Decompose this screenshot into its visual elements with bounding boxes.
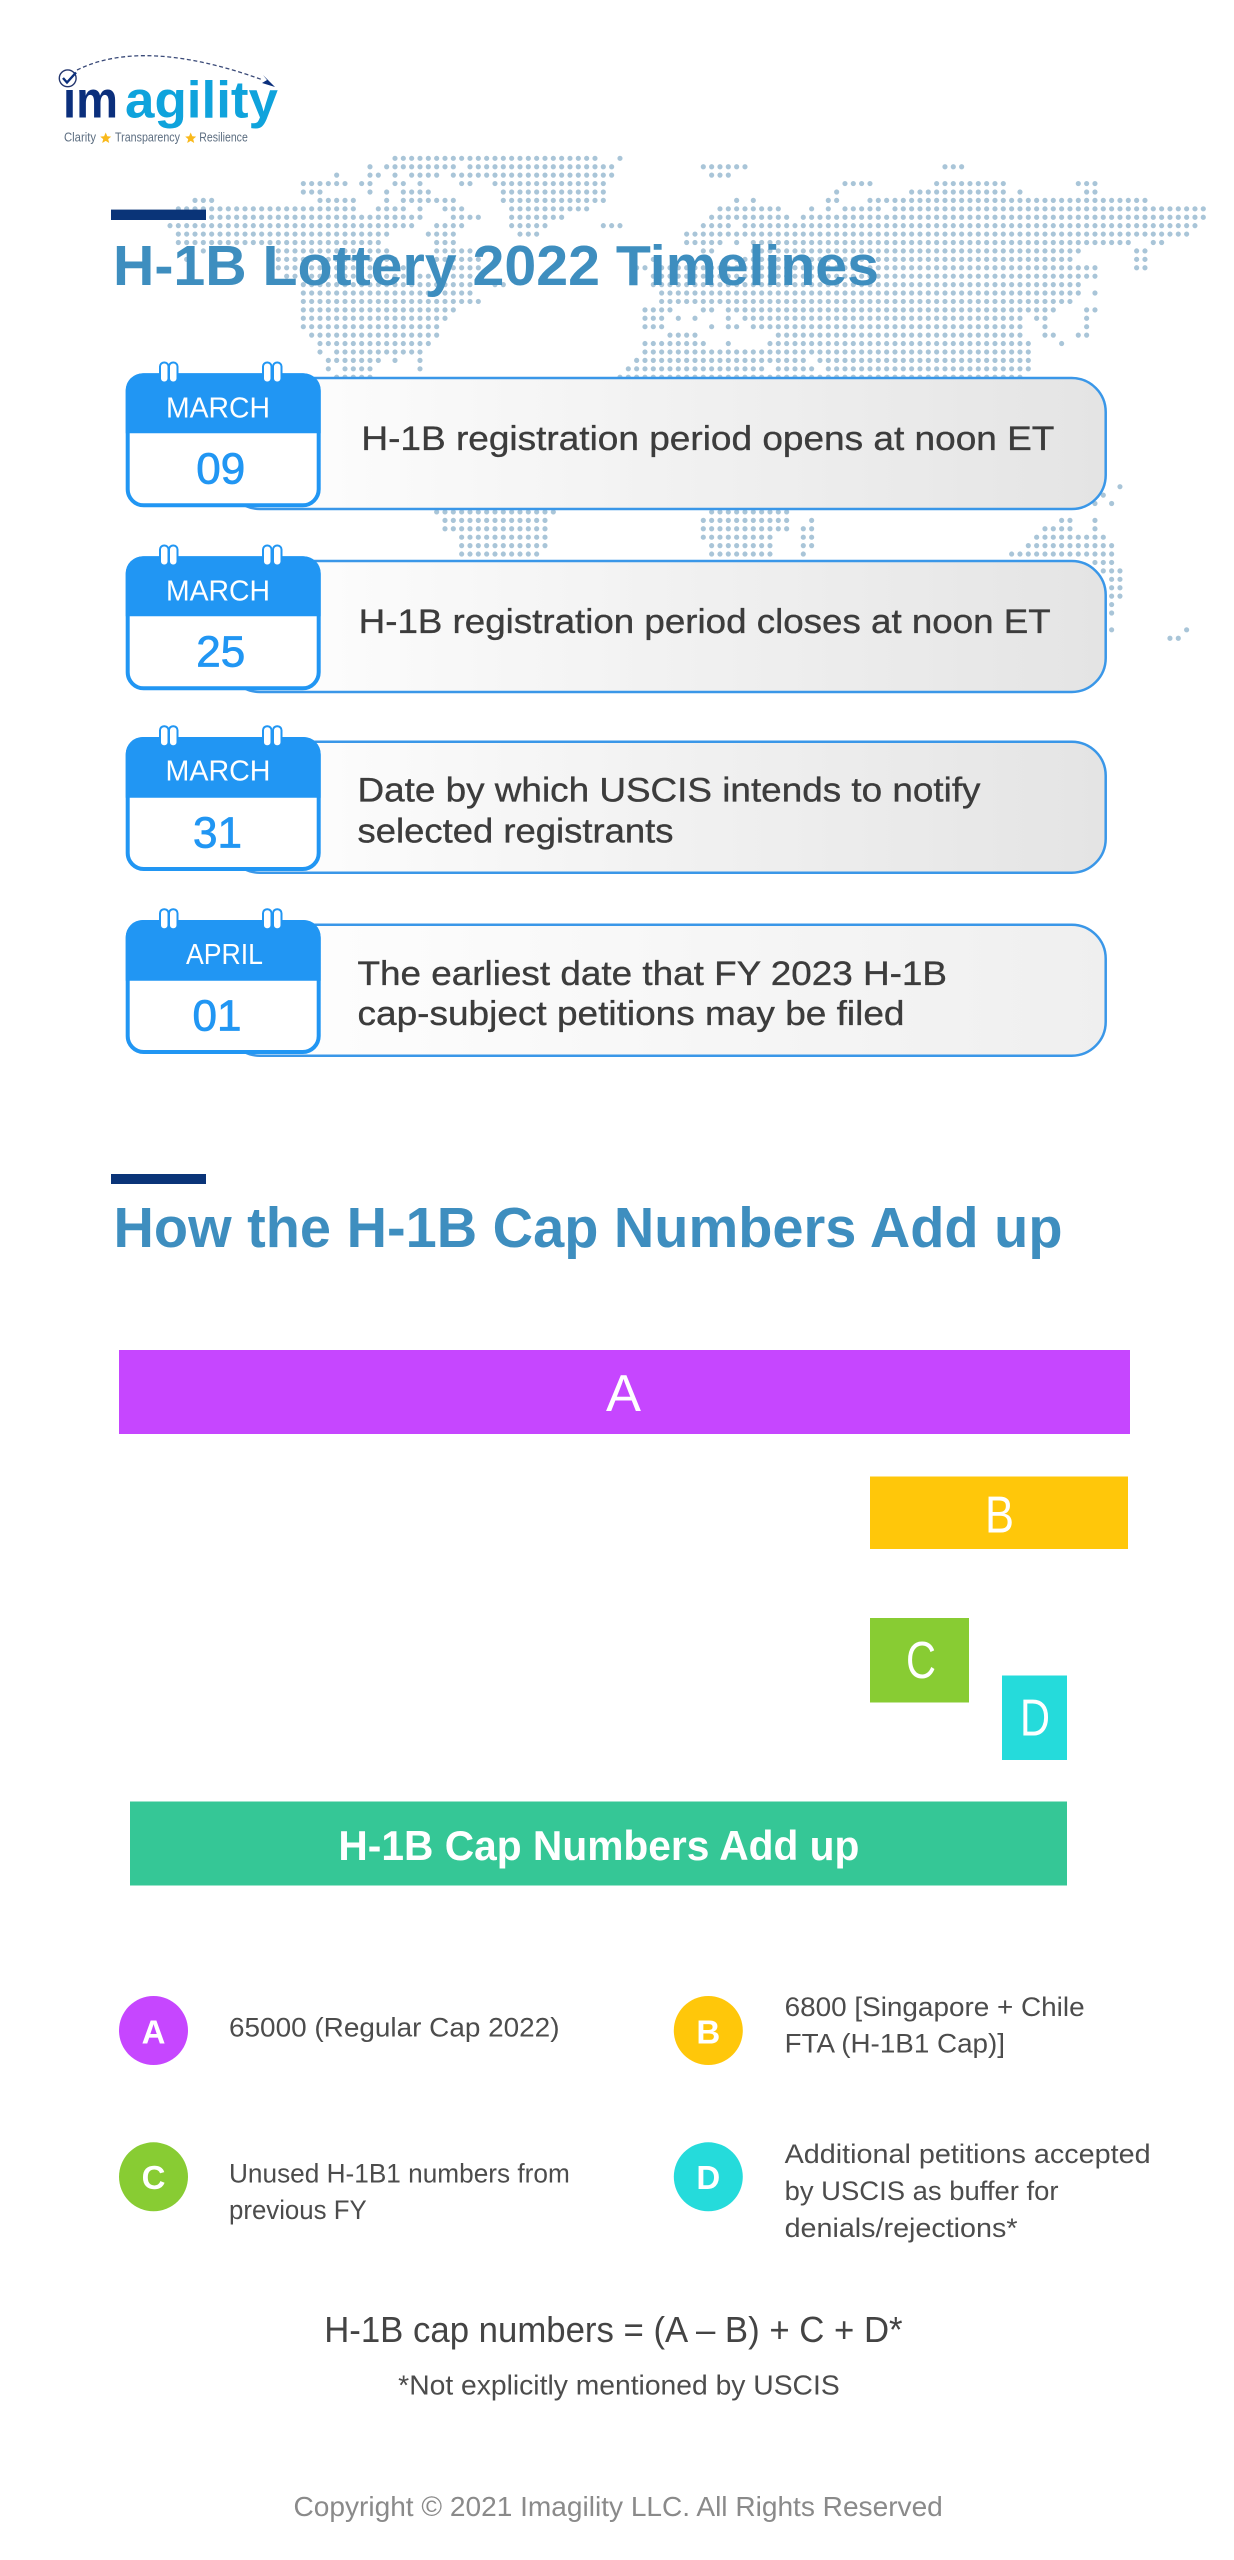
timeline item: March 25: 25 bbox=[196, 627, 245, 676]
timeline item: April 01 bbox=[126, 909, 1106, 1056]
timeline item: March 25 bbox=[126, 546, 1106, 692]
legend: D: denials/rejections* bbox=[785, 2213, 1018, 2243]
bar diagram: cap numbers: H-1B Cap Numbers Add up bbox=[338, 1822, 859, 1869]
legend: B: 6800 [Singapore + Chile bbox=[785, 1992, 1085, 2022]
timeline item: March 09 bbox=[126, 362, 1106, 509]
legend: B: B bbox=[696, 2013, 720, 2050]
bar diagram: cap numbers: C bbox=[906, 1632, 936, 1690]
timeline item: March 09: MARCH bbox=[166, 392, 270, 424]
heading: How the H-1B Cap Numbers Add up: How the H-1B Cap Numbers Add up bbox=[114, 1196, 1062, 1260]
heading: H-1B Lottery 2022 Timelines: H-1B Lottery 2022 Timelines bbox=[113, 234, 879, 298]
logo: imagility: im bbox=[63, 72, 118, 130]
legend: D: Additional petitions accepted bbox=[785, 2139, 1151, 2169]
timeline item: March 25: H-1B registration period closes at noon ET bbox=[359, 603, 1051, 641]
footnote: *Not explicitly mentioned by USCIS bbox=[398, 2370, 840, 2401]
legend: D bbox=[674, 2139, 1151, 2243]
timeline item: March 31: MARCH bbox=[166, 756, 270, 788]
logo: imagility: Transparency bbox=[115, 130, 180, 145]
timeline item: April 01: APRIL bbox=[186, 939, 263, 971]
legend: A bbox=[119, 1996, 560, 2065]
timeline item: April 01: The earliest date that FY 2023 H-1B bbox=[358, 955, 947, 993]
bar diagram: cap numbers: A bbox=[606, 1365, 641, 1423]
timeline item: March 31: 31 bbox=[193, 808, 242, 857]
copyright: Copyright © 2021 Imagility LLC. All Rights Reserved bbox=[294, 2491, 943, 2522]
legend: C: Unused H-1B1 numbers from bbox=[229, 2158, 570, 2188]
timeline item: March 31: selected registrants bbox=[358, 813, 674, 851]
bar diagram: cap numbers: D bbox=[1020, 1690, 1050, 1748]
legend: C: previous FY bbox=[229, 2195, 367, 2225]
bar diagram: cap numbers bbox=[119, 1350, 1130, 1886]
logo: imagility: Clarity bbox=[64, 130, 96, 145]
legend: D: by USCIS as buffer for bbox=[785, 2176, 1059, 2206]
logo: imagility bbox=[59, 56, 278, 145]
timeline item: March 09: 09 bbox=[196, 444, 245, 493]
legend: A: 65000 (Regular Cap 2022) bbox=[229, 2012, 560, 2042]
legend: B: FTA (H-1B1 Cap)] bbox=[785, 2029, 1005, 2059]
dotted world map background bbox=[170, 158, 1203, 638]
timeline item: March 31 bbox=[126, 726, 1106, 873]
timeline item: April 01: cap-subject petitions may be filed bbox=[358, 995, 904, 1033]
bar diagram: cap numbers: B bbox=[985, 1487, 1014, 1545]
timeline item: March 31: Date by which USCIS intends to notify bbox=[358, 772, 980, 810]
timeline item: March 09: H-1B registration period opens at noon ET bbox=[361, 420, 1054, 458]
legend: D: D bbox=[696, 2159, 720, 2196]
timeline item: March 25: MARCH bbox=[166, 575, 270, 607]
legend: C: C bbox=[142, 2159, 165, 2196]
timeline item: April 01: 01 bbox=[193, 992, 241, 1041]
logo: imagility: agility bbox=[125, 72, 278, 130]
formula: H-1B cap numbers = (A – B) + C + D* bbox=[324, 2309, 903, 2350]
legend: C bbox=[119, 2142, 570, 2225]
legend: A: A bbox=[142, 2013, 165, 2050]
logo: imagility: Resilience bbox=[199, 130, 248, 145]
legend: B bbox=[674, 1992, 1085, 2065]
